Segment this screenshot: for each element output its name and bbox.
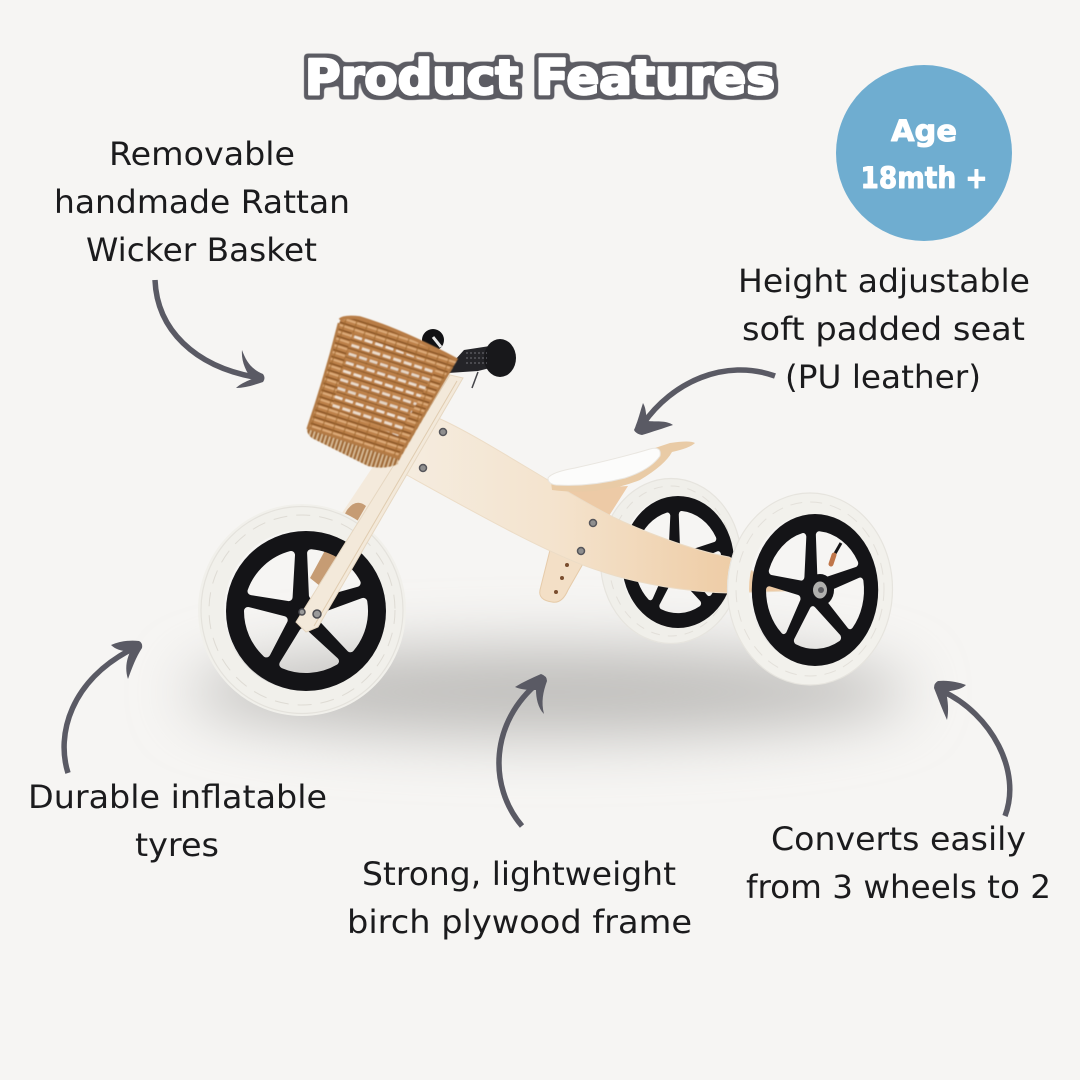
arrow: to seat (634, 370, 775, 435)
front fork (296, 375, 463, 632)
handlebar grip (448, 339, 516, 388)
text: frame feature: Strong, lightweight (362, 855, 676, 893)
text: frame feature: birch plywood frame (347, 903, 692, 941)
badge: age: Age (891, 114, 957, 148)
seat plate (551, 442, 695, 492)
middle wheel (600, 478, 742, 644)
text: basket feature: Removable (109, 135, 295, 173)
back fork plate (340, 464, 402, 546)
wicker basket (307, 317, 458, 468)
seat cushion (548, 448, 660, 485)
text: frame feature (347, 855, 692, 941)
text: conversion feature: from 3 wheels to 2 (746, 868, 1051, 906)
frame bolts (420, 428, 596, 554)
frame beam (405, 418, 786, 593)
badge: age (836, 65, 1012, 241)
arrow: to tyre (64, 641, 142, 773)
text: seat feature: (PU leather) (785, 358, 981, 396)
badge: age: 18mth + (860, 161, 988, 195)
text: conversion feature (746, 820, 1051, 906)
arrow: to frame (499, 674, 547, 826)
title: Product Features (305, 50, 775, 106)
text: tyres feature (28, 778, 327, 864)
back fork slot (310, 503, 366, 586)
handlebar bell (422, 329, 444, 351)
fork axle bolts (299, 609, 321, 618)
text: basket feature: Wicker Basket (86, 231, 317, 269)
ground shadow (186, 648, 910, 736)
text: conversion feature: Converts easily (771, 820, 1026, 858)
text: basket feature (54, 135, 350, 269)
text: seat feature (738, 262, 1030, 396)
text: seat feature: Height adjustable (738, 262, 1030, 300)
front wheel (201, 506, 403, 714)
valve (833, 543, 841, 557)
kick leg (540, 550, 584, 602)
balance bike illustration (201, 317, 892, 714)
text: tyres feature: tyres (135, 826, 219, 864)
text: seat feature: soft padded seat (742, 310, 1025, 348)
text: tyres feature: Durable inflatable (28, 778, 327, 816)
text: basket feature: handmade Rattan (54, 183, 350, 221)
arrow: to basket (155, 280, 264, 388)
seat post support (560, 486, 628, 519)
arrow: to rear wheel (934, 681, 1010, 816)
rear wheel (728, 493, 892, 685)
